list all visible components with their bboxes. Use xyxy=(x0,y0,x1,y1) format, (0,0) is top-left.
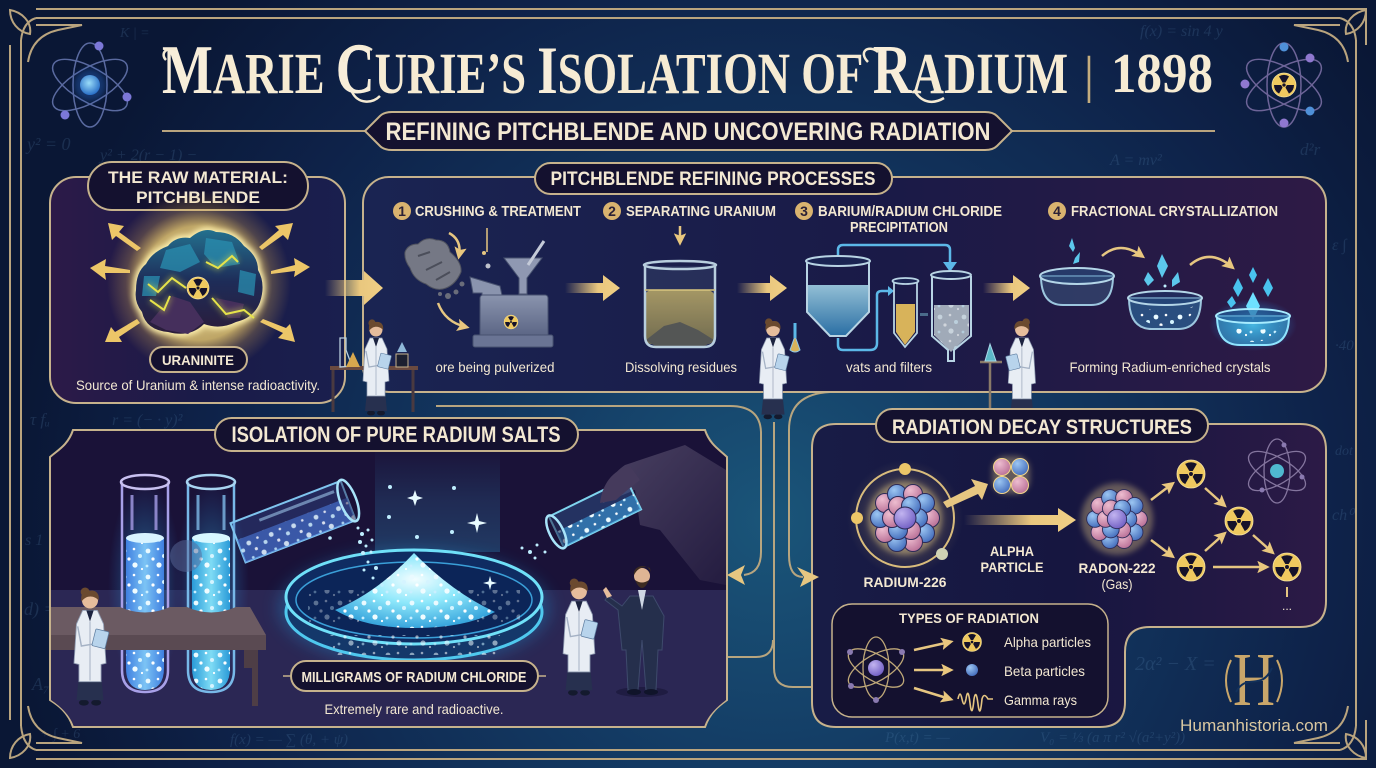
scientist with flask xyxy=(759,318,800,419)
scientist Marie xyxy=(563,578,598,696)
test tube 2 xyxy=(175,475,249,692)
icon: alpha particle cluster xyxy=(992,456,1030,494)
icon: atom top right with radiation xyxy=(1239,42,1329,128)
label: alpha particle xyxy=(980,543,1044,575)
faint math formulas background: τ fᵤ xyxy=(30,410,50,429)
step 3 heading: PRECIPITATION xyxy=(850,220,948,236)
label: alpha particle: PARTICLE xyxy=(980,559,1044,575)
icon: atom source xyxy=(843,637,909,703)
caption: vats and filters: vats and filters xyxy=(846,359,932,375)
arrow: into decay panel xyxy=(797,567,819,587)
caption: dissolving residues: Dissolving residues xyxy=(625,359,737,375)
floor band xyxy=(51,590,726,726)
scientist with tablet xyxy=(74,587,109,706)
panel: raw material xyxy=(50,162,345,403)
faint math formulas background: ·40 xyxy=(1335,338,1354,354)
faint math formulas background: ch⁰ xyxy=(1332,507,1356,524)
arrow: beaker to vats xyxy=(737,275,787,301)
step 4 heading: FRACTIONAL CRYSTALLIZATION xyxy=(1071,204,1278,220)
panel heading: isolation xyxy=(215,418,578,451)
label: alpha particle: ALPHA xyxy=(990,543,1034,559)
panel heading: decay xyxy=(876,409,1208,442)
panel heading: raw material xyxy=(88,162,308,210)
caption: ore pulverized: ore being pulverized xyxy=(436,359,554,375)
icon: alpha xyxy=(962,632,982,652)
faint math formulas background: y² + 2(r − 1) − xyxy=(98,147,197,164)
label: uraninite: URANINITE xyxy=(162,352,234,368)
step 3 heading: BARIUM/RADIUM CHLORIDE xyxy=(818,204,1002,220)
label: alpha particles: Alpha particles xyxy=(1004,634,1091,650)
icon: ore rock and crusher xyxy=(405,228,553,347)
faint math formulas background: 2α² − X = xyxy=(1135,653,1216,675)
icon: radium-226 nucleus xyxy=(847,460,963,576)
faint math formulas background: + ∫ + 6 xyxy=(40,727,80,742)
caption: extremely rare: Extremely rare and radioactive. xyxy=(324,701,504,717)
faint math formulas background: r = (− · y)² xyxy=(112,412,184,429)
step 1 heading: CRUSHING & TREATMENT xyxy=(415,204,581,220)
label: beta particles: Beta particles xyxy=(1004,663,1085,679)
faint math formulas background: s 1 xyxy=(25,532,43,549)
arrow: raw material to refining xyxy=(325,271,383,305)
step 1 heading: 1 xyxy=(398,203,406,219)
arrow: crush to beaker xyxy=(565,275,620,301)
panel: radiation decay structures xyxy=(812,409,1326,727)
logo: Humanhistoria: H xyxy=(1233,638,1275,722)
panel: refining processes xyxy=(363,163,1326,392)
glass disc behind tube xyxy=(170,540,202,572)
icon: glowing pitchblende rock xyxy=(107,191,291,375)
panel heading: refining processes xyxy=(535,163,892,194)
logo: Humanhistoria: Humanhistoria.com xyxy=(1180,716,1328,735)
subtitle banner xyxy=(162,112,1215,150)
faint math formulas background: f(x) = sin 4 y xyxy=(1140,23,1224,40)
faint math formulas background: P(x,t) = — xyxy=(884,730,950,746)
title: | xyxy=(1084,47,1094,104)
label: uraninite xyxy=(150,347,247,372)
panel heading: decay: RADIATION DECAY STRUCTURES xyxy=(892,416,1192,439)
step 3 heading xyxy=(795,202,1002,236)
falling crystal particles xyxy=(328,485,546,587)
step 4 heading: 4 xyxy=(1053,203,1061,219)
arrow: radium to radon xyxy=(964,508,1076,532)
label: gamma rays: Gamma rays xyxy=(1004,692,1077,708)
decay chain: ... xyxy=(1282,599,1292,613)
icon: beaker dissolving residues xyxy=(644,226,716,347)
faint math formulas background: V₀ = ⅓ (a π r² √(a²+y²)) xyxy=(1040,730,1185,746)
label: radium-226: RADIUM-226 xyxy=(864,574,947,590)
title: MARIE CURIE’S ISOLATION OF RADIUM xyxy=(162,32,1068,109)
decay chain xyxy=(1151,460,1301,613)
step 3 heading: 3 xyxy=(800,203,808,219)
hand silhouette xyxy=(602,445,726,585)
panel heading: isolation: ISOLATION OF PURE RADIUM SALTS xyxy=(232,422,560,447)
icon: crystallization bowls xyxy=(1040,238,1297,351)
arrows: radiation emission xyxy=(90,223,310,342)
scientist with lab table xyxy=(330,319,418,415)
types heading: TYPES OF RADIATION xyxy=(899,610,1039,626)
title: 1898 xyxy=(1111,43,1213,105)
label: radon-222: (Gas) xyxy=(1102,576,1132,592)
test tube 1 xyxy=(108,475,182,692)
fingers over tube xyxy=(600,466,640,503)
icon: vats and filters xyxy=(806,245,971,361)
figure: Pierre in dark suit xyxy=(603,566,668,697)
panel heading: raw material: THE RAW MATERIAL: xyxy=(108,168,288,187)
connector lines xyxy=(436,392,830,687)
step 2 heading: SEPARATING URANIUM xyxy=(626,204,776,220)
box: types of radiation xyxy=(832,604,1108,717)
faint math formulas background: d) = xyxy=(24,599,56,620)
label: milligrams of radium chloride xyxy=(283,661,546,691)
icon: gamma wave xyxy=(958,693,993,711)
arrow: to alpha particle xyxy=(943,479,988,508)
faint math formulas background: A = mv² xyxy=(1109,152,1163,169)
sparkles xyxy=(407,490,497,590)
pouring test tube left xyxy=(230,477,364,563)
icon: atom top left xyxy=(45,42,135,127)
faint math formulas background: K | = xyxy=(119,26,150,41)
faint math formulas background: f(x) = — ∑ (θ, + ψ) xyxy=(230,732,348,748)
light column xyxy=(375,452,500,552)
label: radon-222 xyxy=(1078,560,1156,592)
step 2 heading: 2 xyxy=(608,203,616,219)
logo: Humanhistoria xyxy=(1180,638,1328,735)
faint math formulas background: d²r xyxy=(1300,140,1321,159)
faint math formulas background: ε ∫ xyxy=(1332,237,1348,255)
pouring test tube right xyxy=(542,478,642,551)
table xyxy=(51,607,266,706)
faint math formulas background: A₇ xyxy=(31,674,49,694)
panel heading: raw material: PITCHBLENDE xyxy=(136,188,260,207)
faint math formulas background: dot xyxy=(1335,444,1354,459)
arrow: vats to crystallization xyxy=(983,275,1030,301)
icon: beta xyxy=(966,664,978,676)
caption: forming crystals: Forming Radium-enriched crystals xyxy=(1070,359,1270,375)
faint math formulas background: y² = 0 xyxy=(25,134,71,154)
subtitle banner: REFINING PITCHBLENDE AND UNCOVERING RADIATION xyxy=(386,118,990,146)
panel: isolation of pure radium salts xyxy=(50,418,727,727)
label: milligrams of radium chloride: MILLIGRAMS OF RADIUM CHLORIDE xyxy=(302,669,526,686)
caption: source of uranium: Source of Uranium & intense radioactivity. xyxy=(76,377,320,393)
panel heading: refining processes: PITCHBLENDE REFINING PROCESSES xyxy=(550,169,876,190)
scientist at stand xyxy=(980,318,1036,419)
arrow: into isolation panel xyxy=(727,565,745,585)
arrows to radiation types xyxy=(914,642,950,699)
petri dish with radium chloride xyxy=(278,550,550,666)
icon: atom in decay panel xyxy=(1243,439,1311,503)
icon: radon-222 nucleus xyxy=(1081,483,1153,555)
label: radon-222: RADON-222 xyxy=(1078,560,1156,576)
